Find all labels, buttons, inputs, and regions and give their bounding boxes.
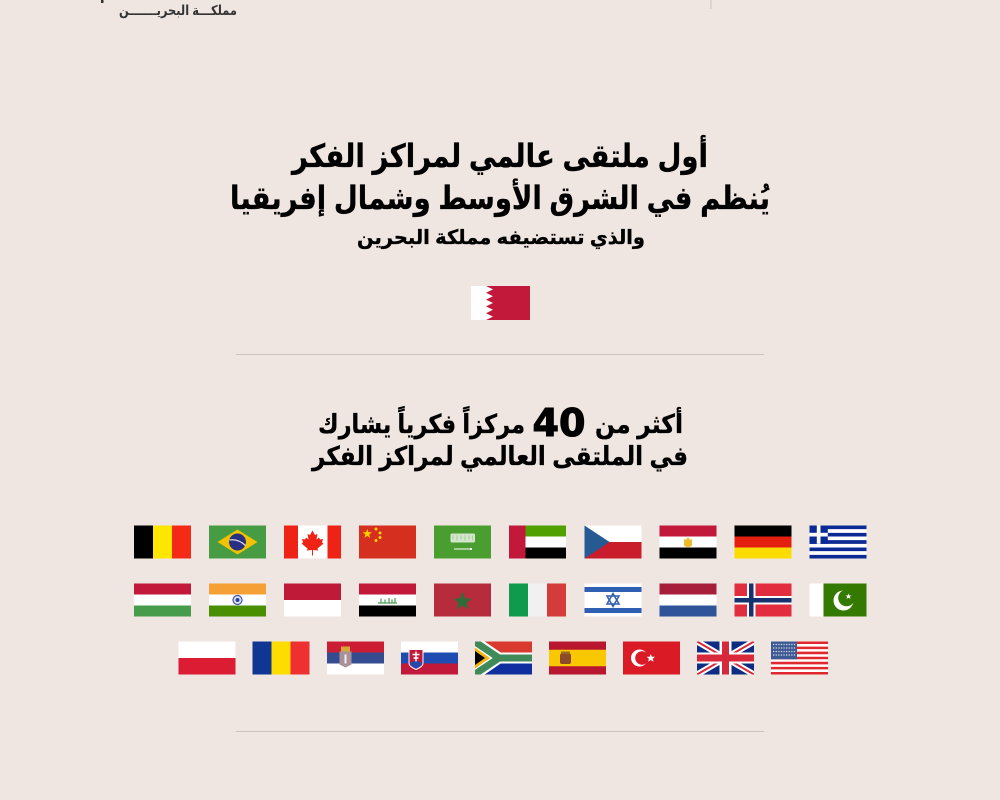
flag: Romania: [252, 642, 310, 674]
flag: Morocco: [434, 584, 491, 616]
flag: Belgium: [134, 526, 191, 558]
flag: Serbia: [327, 642, 384, 674]
flag: Egypt: [660, 526, 716, 558]
subtitle: hosted by Bahrain: والذي تستضيفه مملكة البحرين: [357, 227, 645, 250]
heading: more than 40 think tanks: [310, 401, 688, 472]
flag: United States: [771, 642, 828, 674]
flags grid: [134, 526, 866, 676]
flag: Israel: [584, 584, 642, 616]
flag: Brazil: [209, 526, 266, 558]
flag: Turkey: [623, 642, 680, 674]
flag: United Kingdom: [697, 642, 754, 674]
title: first global forum: أول ملتقى عالمي لمراكز الفكر: [290, 135, 708, 175]
flag: Italy: [509, 584, 566, 616]
title: first global forum: [230, 135, 770, 218]
flag: Pakistan: [810, 584, 866, 616]
flag: Greece: [810, 526, 866, 558]
flag: Netherlands: [660, 584, 716, 616]
flag: Spain: [549, 642, 606, 674]
heading: more than 40 think tanks: أكثر من: [595, 407, 683, 440]
flag: Indonesia: [284, 584, 341, 616]
flag: South Africa: [475, 642, 532, 674]
title: first global forum: يُنظم في الشرق الأوسط وشمال إفريقيا: [230, 178, 770, 218]
heading: more than 40 think tanks: مركزاً فكرياً يشارك: [318, 405, 525, 440]
logo: kingdom of Bahrain wordmark: [101, 0, 237, 18]
flag: Iraq: [359, 584, 416, 616]
heading: more than 40 think tanks: في الملتقى العالمي لمراكز الفكر: [310, 441, 688, 472]
flag: Bahrain: [471, 286, 530, 320]
flag: Canada: [284, 526, 341, 558]
flag: Germany: [734, 526, 792, 558]
flag: Poland: [178, 642, 236, 674]
flag: Norway: [734, 584, 792, 616]
flag: Hungary: [134, 584, 191, 616]
flag: Czech Republic: [584, 526, 642, 558]
flag: China: [359, 526, 416, 558]
logo: kingdom of Bahrain wordmark: مملكـــة البحريـــــــن: [119, 3, 237, 18]
heading: more than 40 think tanks: 40: [532, 401, 586, 445]
flag: Slovakia: [401, 642, 458, 674]
flag: UAE: [509, 526, 566, 558]
flag: India: [209, 584, 266, 616]
flag: Saudi Arabia: [434, 526, 491, 558]
